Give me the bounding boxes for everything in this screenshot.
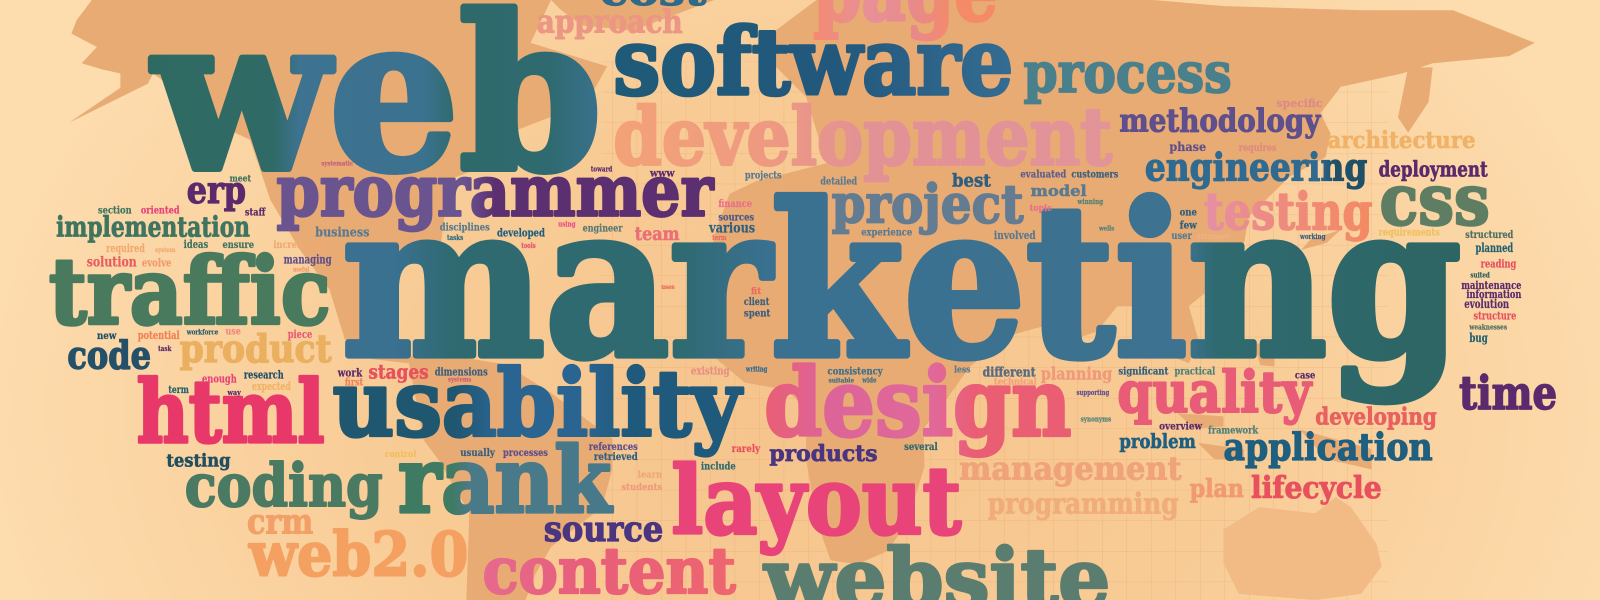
small words: left side: managing — [284, 252, 332, 266]
small words: right side: significant — [1118, 365, 1169, 377]
small words: right side: winning — [1077, 197, 1103, 206]
small words: centre: projects — [745, 170, 782, 182]
word: products: products — [769, 441, 878, 467]
small words: centre: students — [621, 482, 662, 493]
small words: left side: section — [98, 204, 132, 216]
small words: right side: requires — [1239, 142, 1277, 154]
small words: right side: information — [1466, 287, 1521, 301]
small words: centre: developed — [497, 226, 545, 240]
small words: right side: less — [954, 364, 970, 375]
word: testing: testing — [1204, 183, 1372, 243]
small words: right side: specific — [1277, 96, 1323, 110]
word: project: project — [832, 172, 1024, 235]
word: developing: developing — [1315, 402, 1437, 430]
small words: right side: supporting — [1077, 388, 1109, 397]
word: stages: stages — [368, 361, 429, 384]
small words: right side: synonyms — [1081, 414, 1111, 423]
small words: left side: use — [226, 326, 241, 338]
small words: right side: overview — [1159, 421, 1202, 433]
small words: centre: www — [649, 168, 675, 180]
small words: left side: enough — [202, 372, 237, 386]
small words: centre: learn — [638, 470, 663, 481]
small words: right side: best — [952, 172, 991, 192]
small words: right side: planned — [1476, 241, 1514, 255]
small words: right side: wells — [1098, 226, 1115, 233]
small words: centre: writing — [745, 364, 767, 373]
word: problem: problem — [1119, 430, 1196, 453]
small words: centre: term — [712, 233, 727, 242]
word: implementation: implementation — [56, 212, 250, 244]
small words: centre: dimensions — [435, 365, 488, 379]
small words: left side: testing — [166, 451, 231, 471]
word: css: css — [1380, 158, 1490, 241]
small words: left side: research — [244, 368, 284, 382]
small words: centre: tasks — [447, 233, 463, 242]
small words: centre: engineer — [583, 223, 623, 235]
small words: right side: customers — [1071, 169, 1119, 181]
small words: right side: maintenance — [1461, 278, 1521, 292]
small words: centre: control — [385, 449, 417, 460]
word: engineering: engineering — [1145, 146, 1367, 191]
word: plan: plan — [1190, 474, 1244, 504]
small words: centre: using — [558, 220, 576, 229]
small words: right side: one — [1180, 206, 1197, 218]
small words: left side: term — [168, 384, 189, 396]
small words: left side: system — [155, 247, 176, 254]
small words: centre: include — [701, 460, 736, 472]
word: traffic: traffic — [49, 237, 331, 345]
small words: centre: usually — [460, 447, 496, 459]
word: deployment: deployment — [1379, 158, 1488, 183]
word: rank: rank — [398, 428, 613, 534]
map grid — [602, 61, 1388, 600]
small words: centre: client — [744, 296, 770, 308]
small words: left side: systematic — [321, 160, 353, 167]
small words: centre: detailed — [820, 176, 857, 188]
small words: right side: technical — [994, 377, 1037, 388]
small words: right side: few — [1180, 220, 1197, 232]
small words: right side: case — [1295, 370, 1316, 382]
small words: centre: spent — [744, 307, 771, 319]
word: development: development — [613, 89, 1112, 183]
small words: centre: toward — [591, 164, 612, 173]
small words: left side: useful — [293, 266, 310, 273]
small words: left side: work — [337, 366, 362, 380]
word: architecture: architecture — [1328, 126, 1476, 154]
small words: right side: structured — [1465, 229, 1513, 241]
word: design: design — [764, 349, 1071, 459]
word: application: application — [1223, 425, 1433, 469]
small words: right side: suited — [1470, 271, 1490, 280]
small words: centre: systems — [448, 377, 472, 384]
small words: left side: staff — [245, 206, 266, 218]
small words: centre: rarely — [732, 443, 761, 455]
small words: right side: different — [983, 366, 1036, 381]
small words: right side: evaluated — [1020, 169, 1066, 181]
small words: centre: experience — [861, 227, 913, 239]
small words: centre: existing — [691, 363, 730, 377]
continent: south america — [408, 357, 612, 600]
word: source: source — [544, 509, 663, 550]
small words: right side: working — [1299, 232, 1326, 241]
small words: right side — [952, 96, 1521, 437]
small words: right side: involved — [994, 228, 1036, 242]
word: html: html — [137, 363, 324, 463]
word: time: time — [1459, 366, 1557, 420]
small words: left side: ideas — [184, 237, 208, 251]
small words: centre: retrieved — [594, 451, 638, 463]
small words: centre: processes — [503, 447, 548, 459]
continent: australia — [1223, 497, 1382, 600]
small words: left side: expected — [252, 379, 291, 393]
word: usability: usability — [333, 350, 743, 458]
word: lifecycle: lifecycle — [1251, 470, 1382, 505]
word: quality: quality — [1117, 359, 1313, 426]
small words: right side: user — [1171, 230, 1192, 242]
word: product: product — [180, 327, 332, 372]
small words: left side: workforce — [186, 328, 219, 337]
small words: right side: weaknesses — [1469, 323, 1507, 332]
small words: left side: solution — [87, 254, 137, 270]
small words: centre: uses — [661, 284, 675, 291]
word: methodology: methodology — [1119, 103, 1322, 140]
word: programmer: programmer — [277, 149, 714, 232]
small words: left side: ensure — [222, 239, 254, 251]
small words: centre: wide — [861, 376, 877, 385]
small words: left side: first — [345, 377, 363, 389]
small words: left side: business — [315, 226, 369, 241]
small words: right side: reading — [1481, 256, 1516, 270]
word: approach: approach — [537, 4, 683, 41]
word: marketing: marketing — [342, 158, 1461, 405]
small words: centre: consistency — [828, 365, 884, 377]
small words: right side: requirements — [1379, 227, 1440, 239]
word: programming: programming — [988, 486, 1179, 520]
small words: left side: evolve — [142, 255, 171, 269]
small words: left side: task — [158, 344, 172, 353]
word: web2.0: web2.0 — [248, 520, 468, 591]
small words: centre: finance — [718, 198, 752, 210]
small words: centre: fit — [751, 286, 762, 297]
word: management: management — [959, 451, 1182, 488]
small words: left side: new — [97, 330, 117, 342]
word: coding: coding — [185, 450, 383, 520]
small words: right side: planning — [1041, 365, 1113, 384]
word: crm: crm — [247, 502, 313, 543]
word: process: process — [1023, 40, 1232, 105]
word: erp: erp — [187, 168, 246, 212]
island: greenland — [551, 0, 714, 31]
small words: centre: tools — [521, 241, 536, 250]
small words: right side: model — [1031, 182, 1087, 200]
small words: left side: oriented — [141, 204, 180, 216]
small words: left side: required — [106, 241, 145, 255]
small words: right side: phase — [1169, 140, 1206, 154]
small words: left side: potential — [138, 328, 180, 342]
small words: centre: sources — [718, 211, 754, 223]
small words: right side: structure — [1473, 308, 1516, 322]
small words: centre: various — [708, 221, 755, 237]
small words: right side: practical — [1174, 365, 1215, 377]
small words: left side: way — [227, 388, 242, 397]
small words: left side: incremental — [273, 239, 329, 251]
small words: centre: several — [904, 441, 938, 453]
island: japan — [1301, 230, 1341, 250]
continent: north america — [69, 0, 607, 363]
small words: left side: meet — [230, 174, 252, 185]
small words: left side: piece — [288, 327, 312, 341]
small words: right side: evolution — [1464, 297, 1509, 311]
small words: centre: disciplines — [440, 222, 490, 234]
word: software: software — [613, 8, 1013, 116]
word: layout: layout — [671, 447, 961, 557]
small words: right side: bug — [1469, 331, 1488, 345]
word: team: team — [635, 224, 680, 245]
small words: centre — [385, 164, 938, 493]
small words: right side: framework — [1208, 425, 1259, 437]
small words: left side — [87, 160, 369, 471]
island: kamchatka — [1398, 67, 1433, 133]
small words: right side: topic — [1030, 203, 1052, 214]
continent: eurasia and africa — [694, 0, 1535, 564]
small words: centre: suitable — [829, 378, 854, 385]
word: code: code — [67, 333, 151, 378]
islands: southeast asia — [1178, 413, 1223, 429]
small words: centre: references — [589, 441, 638, 453]
small words: right side: stronger — [1197, 231, 1231, 241]
